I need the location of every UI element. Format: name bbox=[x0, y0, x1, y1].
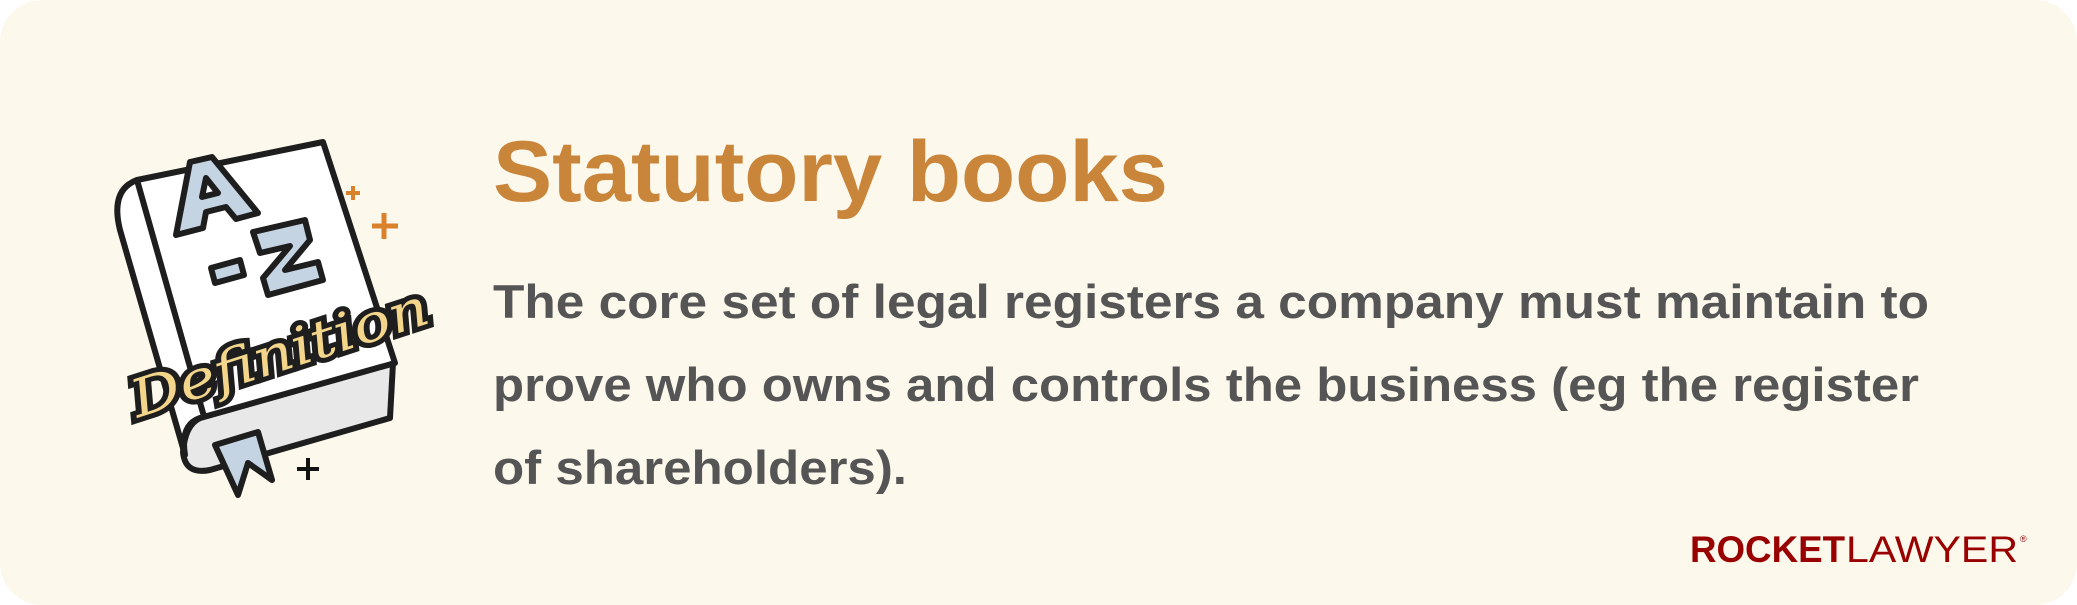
logo: Rocket Lawyer bbox=[1690, 529, 2027, 570]
body text: prove who owns and controls the business (eg the register bbox=[493, 358, 1919, 411]
icon: sparkles bbox=[346, 186, 398, 239]
logo: Rocket Lawyer: LAWYER bbox=[1846, 529, 2018, 570]
logo: Rocket Lawyer: ® bbox=[2020, 534, 2027, 544]
body text: The core set of legal registers a company must maintain to bbox=[493, 275, 1929, 328]
body text bbox=[493, 275, 1929, 494]
logo: Rocket Lawyer: ROCKET bbox=[1690, 529, 1845, 570]
body text: of shareholders). bbox=[493, 441, 907, 494]
icon: A-Z definition book bbox=[117, 142, 395, 495]
definition script text: Definition bbox=[122, 277, 436, 431]
title: Statutory books bbox=[493, 124, 1168, 220]
